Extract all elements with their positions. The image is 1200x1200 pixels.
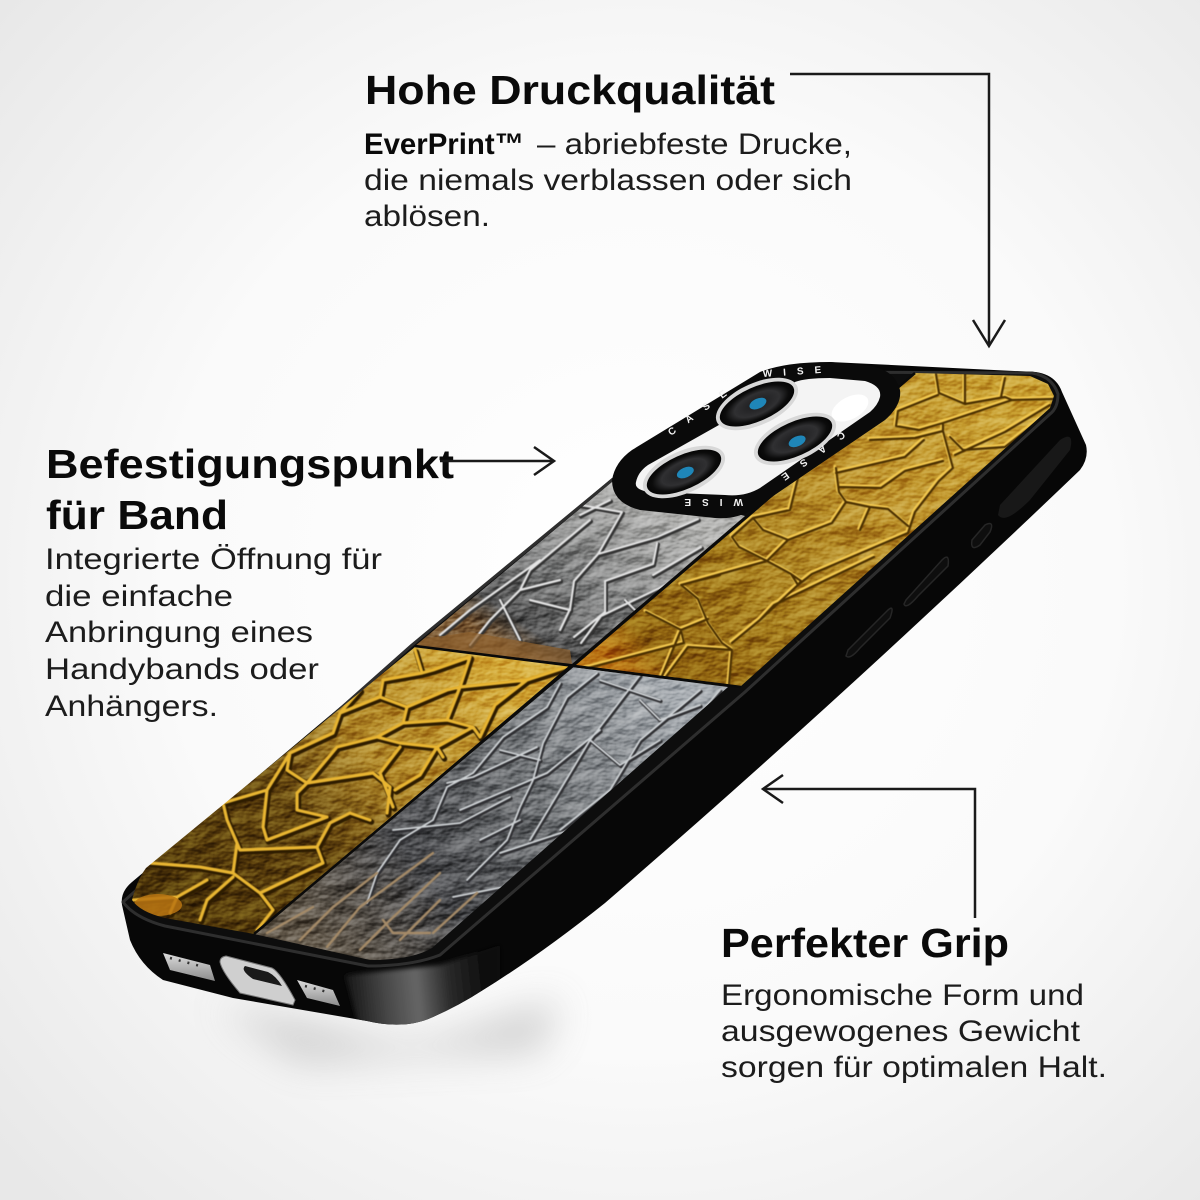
body text: ausgewogenes Gewicht [721, 1015, 1081, 1048]
side buttons [846, 437, 1071, 657]
body text: Integrierte Öffnung für [45, 543, 382, 576]
body text [45, 543, 382, 723]
panel: lower silver [250, 660, 740, 965]
lens right [746, 402, 844, 476]
body text: Anbringung eines [45, 616, 313, 649]
heading: Befestigungspunkt [46, 441, 454, 487]
body text: ablösen. [364, 200, 490, 233]
panel: lower gold [125, 640, 575, 940]
callout: Perfekter Grip [721, 920, 1107, 1084]
body text: die niemals verblassen oder sich [364, 164, 852, 197]
callout: Befestigungspunkt für Band [45, 441, 454, 723]
ring lettering right: CASE [766, 429, 847, 491]
rim around back plate [123, 372, 1058, 966]
lens top [708, 367, 806, 441]
panel: upper silver [410, 475, 750, 670]
lens left [635, 435, 733, 509]
camera island [612, 362, 900, 518]
body text: EverPrint™ [364, 128, 524, 161]
body text [364, 128, 852, 233]
panel: upper gold [570, 370, 1060, 690]
body text: Handybands oder [45, 653, 319, 686]
phone case [122, 362, 1087, 1030]
charging port [220, 956, 295, 1005]
heading: Perfekter Grip [721, 920, 1009, 966]
body text: sorgen für optimalen Halt. [721, 1051, 1107, 1084]
body text: Ergonomische Form und [721, 979, 1084, 1012]
callout: Hohe Druckqualität [364, 67, 852, 233]
body text [721, 979, 1107, 1084]
case body [122, 362, 1087, 1025]
body text: die einfache [45, 580, 233, 613]
heading [46, 441, 454, 538]
speaker left [163, 953, 215, 981]
heading: für Band [46, 492, 228, 538]
arrow: to strap point [440, 447, 554, 475]
ring lettering top: WISE [762, 364, 833, 380]
flash [827, 389, 873, 427]
arrow: to case back [790, 74, 1005, 346]
ring lettering bottom: WISE [673, 496, 743, 507]
arrow: to case side [763, 775, 975, 918]
speaker right [297, 980, 340, 1006]
camera ring [612, 362, 900, 518]
body text: Anhängers. [45, 690, 218, 723]
camera window [636, 378, 880, 495]
phone shadow [215, 1000, 560, 1060]
heading: Hohe Druckqualität [365, 67, 775, 113]
panel dividers [254, 373, 915, 934]
body text: – abriebfeste Drucke, [537, 128, 852, 161]
ring lettering top left: CASE [666, 380, 741, 438]
glossy bumper corner [346, 955, 502, 1025]
